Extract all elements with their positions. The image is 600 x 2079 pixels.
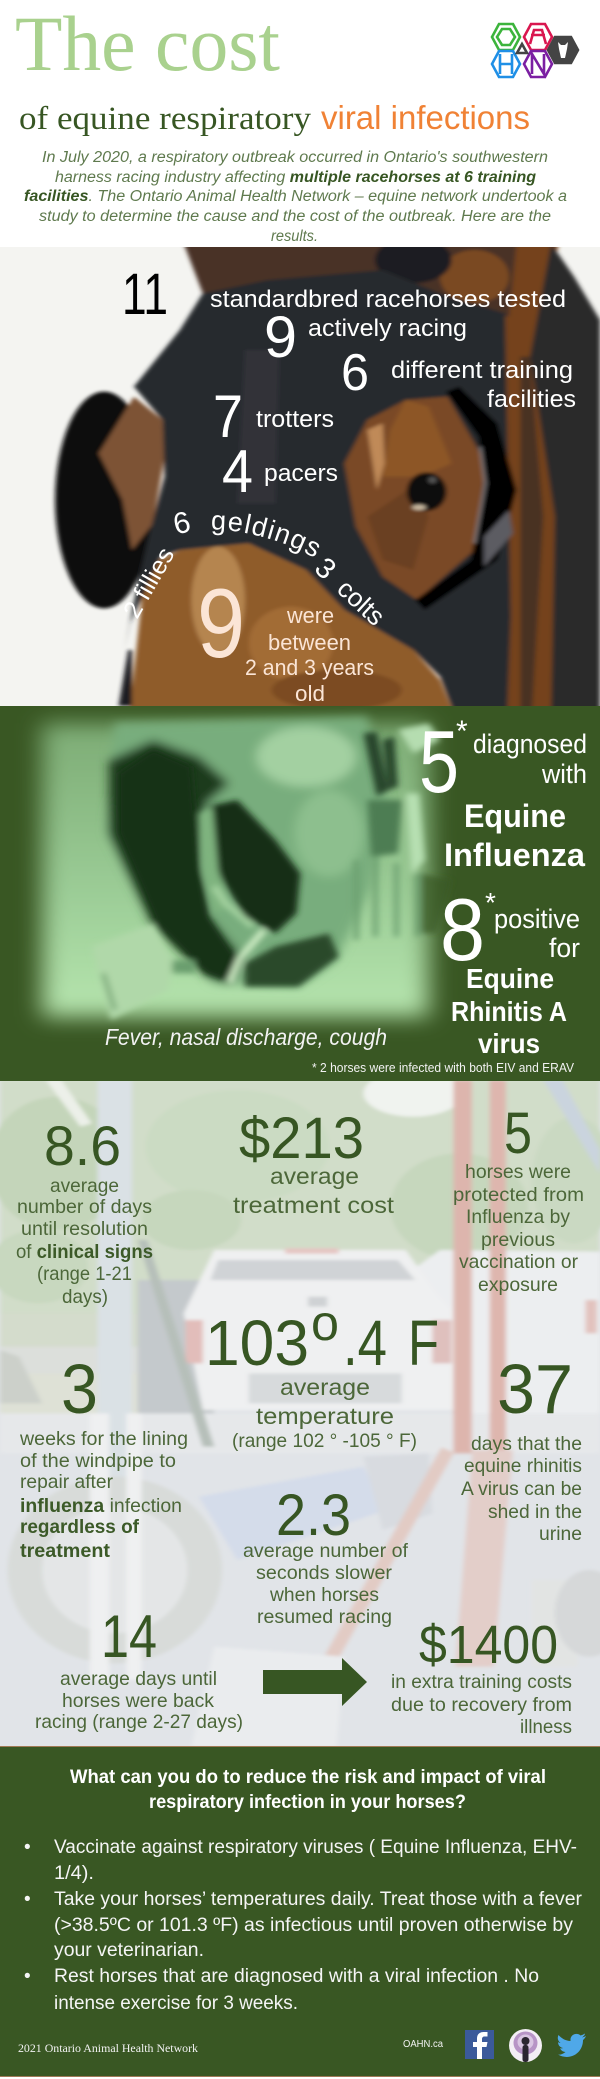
stat: 11 racehorses tested: 11 <box>122 262 168 327</box>
stat: $1400 extra training costs: $1400 <box>419 1615 558 1675</box>
panel: faded truck and stable background photo <box>0 1081 600 1746</box>
stat: 8 positive for equine rhinitis A virus: Equine <box>466 963 554 994</box>
stat: 2.3 seconds slower: average number of <box>243 1540 409 1562</box>
stat: 7 trotters: trotters <box>256 406 334 433</box>
stat: 5 diagnosed with equine influenza: * <box>456 715 468 748</box>
title: The cost <box>15 0 280 87</box>
panel heading: respiratory infection in your horses? <box>149 1791 466 1813</box>
intro paragraph: results. <box>271 228 318 245</box>
stat: 8 positive for equine rhinitis A virus: * <box>485 887 496 918</box>
bullet: vaccinate: • <box>24 1837 31 1858</box>
subtitle: viral infections <box>321 99 530 136</box>
stat: 8 positive for equine rhinitis A virus: positive <box>494 904 580 934</box>
stat: average temperature: (range 102 ° -105 ° F) <box>232 1430 417 1452</box>
stat: $1400 extra training costs: in extra training costs <box>391 1671 572 1693</box>
stat: 3 weeks windpipe repair: weeks for the lining <box>19 1428 188 1450</box>
stat: 9 between 2 and 3 years old: 2 and 3 years <box>245 655 374 680</box>
panel: green nasal discharge photo <box>0 706 600 1081</box>
subtitle: of equine respiratory <box>19 101 312 137</box>
arrow <box>263 1658 367 1706</box>
intro paragraph <box>24 149 567 245</box>
footnote: * 2 horses were infected with both EIV and ERAV <box>312 1061 575 1075</box>
intro paragraph: facilities. The Ontario Animal Health Network – equine network undertook a <box>24 188 567 205</box>
stat: 3 weeks windpipe repair <box>19 1350 188 1562</box>
panel heading: What can you do to reduce the risk and impact of viral <box>70 1766 546 1788</box>
stat: 9 between 2 and 3 years old: old <box>295 681 325 706</box>
stat: 2.3 seconds slower: 2.3 <box>276 1483 351 1548</box>
stat: 5 diagnosed with equine influenza: Equine <box>464 798 566 834</box>
stat: 5 diagnosed with equine influenza: diagnosed <box>473 729 587 759</box>
stat: 8.6 days to resolution: average <box>50 1175 119 1197</box>
icon: twitter <box>558 2034 586 2057</box>
stat: 4 pacers <box>222 438 338 505</box>
stat: 37 days virus shed <box>461 1350 582 1545</box>
icon: facebook <box>465 2030 494 2059</box>
stat: $1400 extra training costs: illness <box>520 1716 572 1738</box>
stat: 37 days virus shed: equine rhinitis <box>464 1455 582 1477</box>
stat: 8.6 days to resolution <box>16 1114 153 1308</box>
stat: 2.3 seconds slower: resumed racing <box>257 1606 392 1628</box>
stat: 4 pacers: 4 <box>222 438 253 505</box>
bullet: rest <box>24 1966 539 2014</box>
intro paragraph: study to determine the cause and the cost of the outbreak. Here are the <box>39 208 551 225</box>
stat: average temperature: 103 <box>205 1307 309 1379</box>
stat: 4 pacers: pacers <box>264 460 338 487</box>
stat: 8.6 days to resolution: of clinical signs <box>16 1241 153 1263</box>
stat: 14 days until back racing: 14 <box>101 1603 157 1670</box>
stat: 6 training facilities <box>341 344 576 413</box>
stat: 7 trotters <box>213 383 334 450</box>
stat: average temperature: o <box>311 1295 339 1351</box>
panel heading <box>70 1766 546 1813</box>
footer website: OAHN.ca <box>403 2039 443 2050</box>
stat: 6 geldings curved: 6 geldings <box>174 512 320 556</box>
stat: 11 racehorses tested <box>122 262 566 327</box>
stat: 9 actively racing: actively racing <box>308 315 467 342</box>
stat: 3 weeks windpipe repair: repair after <box>20 1471 113 1493</box>
bullet: temperatures: • <box>24 1889 31 1910</box>
stat: $213 treatment cost: average <box>270 1163 359 1189</box>
stat: 5 protected horses: 5 <box>504 1101 532 1166</box>
stat: 5 protected horses <box>453 1101 584 1296</box>
stat: 37 days virus shed: A virus can be <box>461 1478 582 1500</box>
stat: 3 weeks windpipe repair: of the windpipe to <box>20 1450 176 1472</box>
stat: average temperature: temperature <box>256 1403 394 1429</box>
stat: 8 positive for equine rhinitis A virus: virus <box>478 1028 540 1059</box>
stat: 5 protected horses: exposure <box>478 1274 558 1296</box>
stat: 8 positive for equine rhinitis A virus <box>440 880 580 1059</box>
stat: $213 treatment cost: $213 <box>239 1106 364 1171</box>
stat: 37 days virus shed: urine <box>539 1523 582 1545</box>
stat: 6 training facilities: facilities <box>487 386 576 413</box>
bullet: vaccinate: 1/4). <box>54 1863 94 1884</box>
stat: 14 days until back racing: racing (range 2-27 days) <box>35 1711 243 1733</box>
stat: 8 positive for equine rhinitis A virus: for <box>549 933 580 963</box>
stat: 2.3 seconds slower <box>243 1483 409 1628</box>
bullet: rest: Rest horses that are diagnosed with a viral infection . No <box>54 1966 539 1987</box>
bullet: rest: intense exercise for 3 weeks. <box>54 1993 298 2014</box>
stat: 5 protected horses: Influenza by <box>466 1206 570 1228</box>
stat: $1400 extra training costs <box>391 1615 572 1738</box>
stat: 8.6 days to resolution: until resolution <box>21 1218 148 1240</box>
intro paragraph: In July 2020, a respiratory outbreak occurred in Ontario's southwestern <box>42 149 548 166</box>
stat: average temperature: F <box>408 1307 439 1379</box>
bullet: temperatures: (>38.5ºC or 101.3 ºF) as infectious until proven otherwise by <box>54 1915 574 1936</box>
bullet: temperatures <box>24 1889 583 1961</box>
stat: 8.6 days to resolution: days) <box>62 1286 108 1308</box>
stat: 3 weeks windpipe repair: treatment <box>20 1540 111 1562</box>
stat: 3 weeks windpipe repair: 3 <box>61 1350 98 1428</box>
stat: 8.6 days to resolution: number of days <box>17 1196 152 1218</box>
stat: 6 training facilities: different training <box>391 357 573 384</box>
stat: 37 days virus shed: days that the <box>471 1433 582 1455</box>
stat: 9 actively racing: 9 <box>264 305 297 370</box>
stat: 3 weeks windpipe repair: regardless of <box>20 1516 139 1538</box>
stat: 5 protected horses: protected from <box>453 1184 584 1206</box>
stat: 3 weeks windpipe repair: influenza infection <box>20 1495 182 1517</box>
stat: 5 diagnosed with equine influenza: with <box>541 759 587 789</box>
stat: 2 fillies curved: 2 fillies <box>124 549 174 619</box>
caption: symptoms: Fever, nasal discharge, cough <box>105 1024 387 1050</box>
panel: horse in racing hood photo <box>0 247 600 706</box>
bullet: vaccinate <box>24 1837 577 1884</box>
stat: 8.6 days to resolution: 8.6 <box>44 1114 121 1177</box>
stat: 2.3 seconds slower: seconds slower <box>256 1562 393 1584</box>
footer credit: 2021 Ontario Animal Health Network <box>18 2041 198 2055</box>
bullet: vaccinate: Vaccinate against respiratory viruses ( Equine Influenza, EHV- <box>54 1837 577 1858</box>
stat: $1400 extra training costs: due to recovery from <box>391 1694 572 1716</box>
stat: average temperature: average <box>280 1374 370 1400</box>
stat: average temperature: .4 <box>343 1307 387 1379</box>
stat: 8 positive for equine rhinitis A virus: Rhinitis A <box>451 996 567 1027</box>
stat: $213 treatment cost: treatment cost <box>233 1192 395 1218</box>
stat: 11 racehorses tested: standardbred racehorses tested <box>210 286 566 313</box>
stat: 14 days until back racing <box>35 1603 243 1733</box>
stat: 8 positive for equine rhinitis A virus: 8 <box>440 880 485 979</box>
stat: 9 actively racing <box>264 305 467 370</box>
bullet: temperatures: Take your horses’ temperatures daily. Treat those with a fever <box>54 1889 583 1910</box>
subtitle <box>19 99 530 137</box>
panel: what can you do <box>0 1746 600 2077</box>
logo: OAHN hexagons <box>492 24 578 77</box>
bullet: rest: • <box>24 1966 31 1987</box>
stat: 8.6 days to resolution: (range 1-21 <box>37 1263 132 1285</box>
stat: 5 protected horses: horses were <box>465 1161 571 1183</box>
stat: 5 diagnosed with equine influenza: Influenza <box>444 837 585 873</box>
stat: 5 protected horses: vaccination or <box>459 1251 578 1273</box>
bullet: temperatures: your veterinarian. <box>54 1940 204 1961</box>
stat: 14 days until back racing: average days until <box>60 1668 217 1690</box>
stat: 37 days virus shed: shed in the <box>488 1501 582 1523</box>
stat: 5 protected horses: previous <box>481 1229 555 1251</box>
stat: 5 diagnosed with equine influenza: 5 <box>419 712 459 811</box>
stat: $213 treatment cost <box>233 1106 395 1218</box>
stat: 14 days until back racing: horses were back <box>62 1690 214 1712</box>
intro paragraph: harness racing industry affecting multiple racehorses at 6 training <box>55 169 537 186</box>
stat: 9 between 2 and 3 years old <box>197 568 374 706</box>
stat: 2.3 seconds slower: when horses <box>269 1584 379 1606</box>
stat: 7 trotters: 7 <box>213 383 243 450</box>
stat: 9 between 2 and 3 years old: were <box>286 603 334 628</box>
stat: 9 between 2 and 3 years old: between <box>268 630 351 655</box>
stat: 6 training facilities: 6 <box>341 344 369 402</box>
icon: podcast <box>509 2029 542 2062</box>
stat: 37 days virus shed: 37 <box>497 1350 573 1428</box>
stat: average temperature <box>205 1295 439 1452</box>
stat: 3 colts curved: 3 colts <box>316 558 382 625</box>
stat: 5 diagnosed with equine influenza <box>419 712 587 873</box>
stat: 9 between 2 and 3 years old: 9 <box>197 568 245 678</box>
